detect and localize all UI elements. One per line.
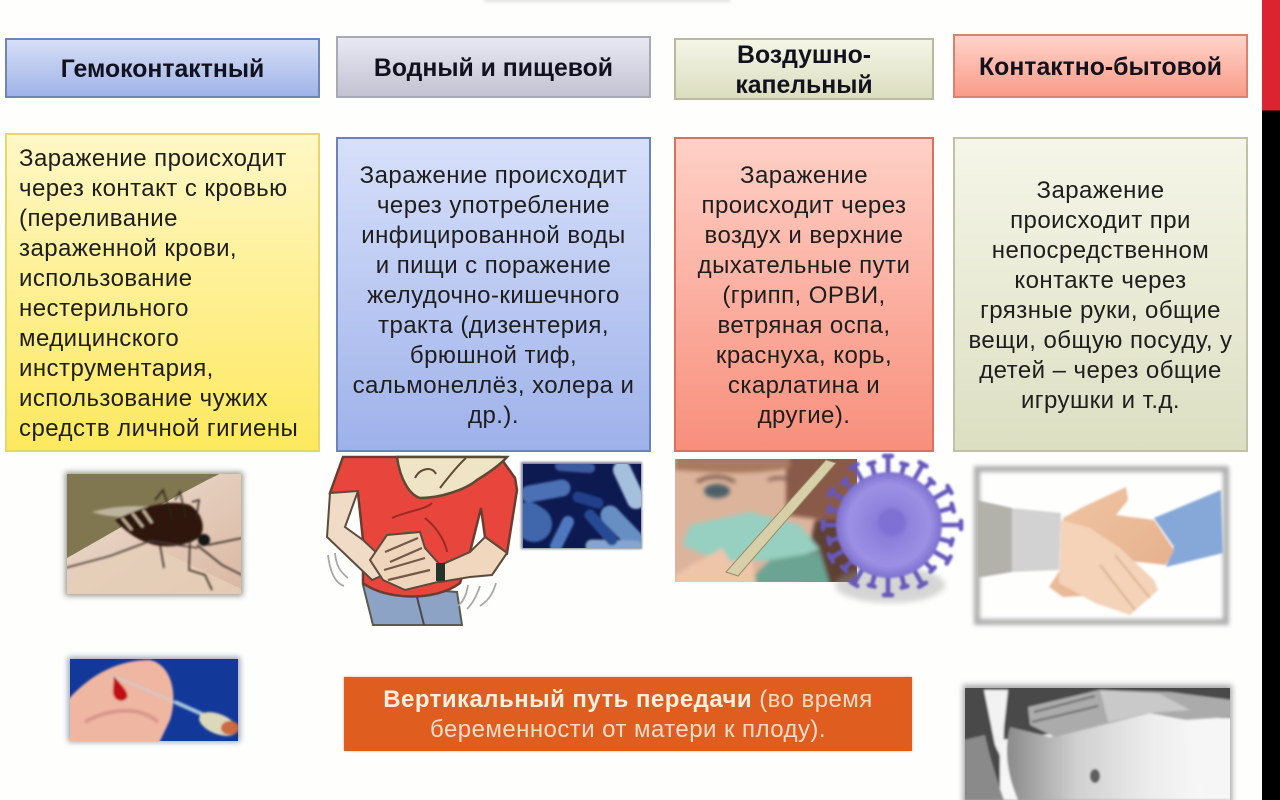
panel: контактно-бытовой: детей – через общие [979,357,1222,384]
panel: гемоконтактный [5,133,320,452]
panel: водный и пищевой: через употребление [377,192,610,219]
panel: контактно-бытовой: контакте через [1014,267,1187,294]
callout: вертикальный путь [344,677,912,751]
panel: гемоконтактный: зараженной крови, [19,235,237,262]
panel: водный и пищевой: желудочно-кишечного [367,282,620,309]
panel: воздушно-капельный: краснуха, корь, [716,342,892,369]
icon: bacteria micrograph [521,462,642,549]
panel: воздушно-капельный: воздух и верхние [705,222,903,249]
panel: водный и пищевой: др.). [468,402,519,429]
panel: гемоконтактный: средств личной гигиены [19,415,298,442]
header: Воздушно-капельный [674,38,934,100]
header: Водный и пищевой: Водный и пищевой [374,54,613,82]
panel: воздушно-капельный [674,137,934,452]
header: Контактно-бытовой [953,34,1248,98]
header: Воздушно-капельный: Воздушно- [737,42,871,68]
panel: водный и пищевой: тракта (дизентерия, [378,312,609,339]
clipped title [484,0,730,2]
panel: водный и пищевой: сальмонеллёз, холера и [353,372,634,399]
panel: контактно-бытовой: вещи, общую посуду, у [968,327,1233,354]
header: Гемоконтактный: Гемоконтактный [61,56,264,82]
panel: водный и пищевой [336,137,651,452]
panel: гемоконтактный: через контакт с кровью [19,175,288,202]
icon: handshake photo [976,469,1226,622]
sidebar accent [1262,0,1280,800]
panel: воздушно-капельный: происходит через [702,192,906,219]
panel: воздушно-капельный: ветряная оспа, [717,312,891,339]
panel: контактно-бытовой [953,137,1248,452]
header: Контактно-бытовой: Контактно-бытовой [979,54,1222,80]
icon: pregnant belly photo [963,685,1232,800]
panel: водный и пищевой: брюшной тиф, [410,342,577,369]
panel: контактно-бытовой: игрушки и т.д. [1021,387,1180,414]
icon: finger and needle photo [60,657,240,745]
header: Воздушно-капельный: капельный [735,72,873,98]
panel: контактно-бытовой: непосредственном [992,237,1209,264]
panel: гемоконтактный: медицинского [19,325,179,352]
panel: гемоконтактный: (переливание [19,205,178,232]
icon: virus [823,456,961,603]
header: Водный и пищевой [336,36,651,98]
callout: вертикальный путь: Вертикальный путь передачи (во время [383,686,873,713]
panel: гемоконтактный: нестерильного [19,295,189,322]
panel: контактно-бытовой: грязные руки, общие [980,297,1221,324]
panel: воздушно-капельный: другие). [758,402,850,429]
panel: водный и пищевой: Заражение происходит [360,162,627,189]
panel: контактно-бытовой: Заражение [1036,177,1164,204]
panel: водный и пищевой: инфицированной воды [361,222,626,249]
panel: гемоконтактный: использование чужих [19,385,268,412]
panel: воздушно-капельный: (грипп, ОРВИ, [722,282,886,309]
panel: водный и пищевой: и пищи с поражение [376,252,611,279]
panel: воздушно-капельный: дыхательные пути [698,252,910,279]
panel: гемоконтактный: инструментария, [19,355,214,382]
icon: mosquito photo [60,470,250,600]
panel: гемоконтактный: Заражение происходит [19,145,287,172]
panel: контактно-бытовой: происходит при [1010,207,1191,234]
callout: вертикальный путь: беременности от матери к плоду). [430,716,826,743]
icon: man with stomach ache [327,457,517,625]
header: Гемоконтактный [5,38,320,98]
panel: воздушно-капельный: Заражение [740,162,868,189]
panel: воздушно-капельный: скарлатина и [728,372,880,399]
icon: woman in mask with thermometer [675,459,857,582]
panel: гемоконтактный: использование [19,265,192,292]
